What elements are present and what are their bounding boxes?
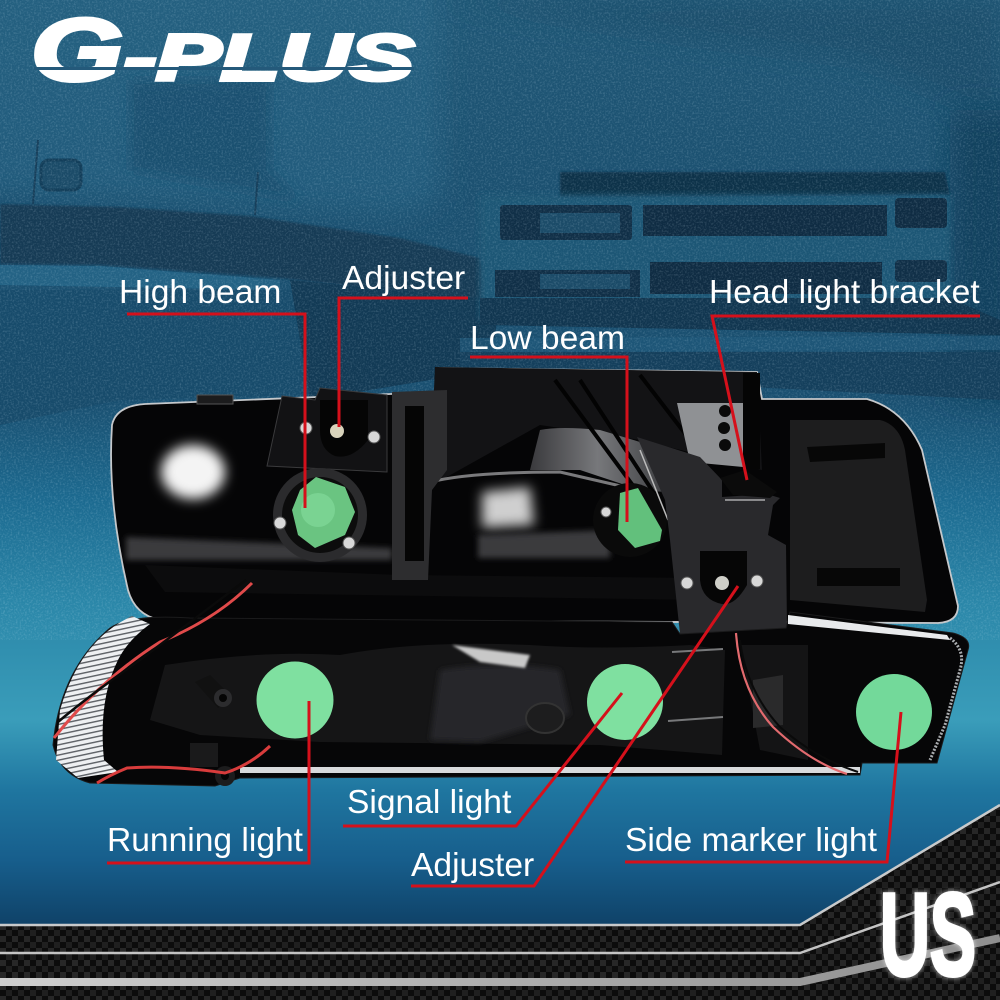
truck silhouette bbox=[0, 0, 1000, 425]
rods bbox=[668, 649, 723, 721]
side clip bbox=[753, 675, 783, 728]
label: Adjuster (top) bbox=[339, 260, 468, 427]
dark right module bbox=[740, 645, 808, 760]
glare right of centre bbox=[478, 530, 610, 558]
top bracket plate bbox=[430, 367, 762, 510]
lower signal housing bbox=[53, 612, 969, 786]
label: Signal light: Signal light bbox=[347, 784, 512, 821]
inner reflector bbox=[150, 644, 725, 755]
label: Low beam bbox=[470, 320, 627, 522]
vertical pillar bbox=[392, 390, 447, 580]
low beam socket bbox=[593, 450, 668, 557]
reflector lower slot bbox=[817, 568, 900, 586]
logo: G-PLUS: G bbox=[31, 0, 123, 99]
label: High beam bbox=[119, 274, 305, 508]
reflector highlight bbox=[430, 665, 570, 742]
mounting tab bbox=[197, 395, 233, 404]
bottom ledge of housing bbox=[145, 565, 700, 600]
lower grey band bbox=[126, 537, 392, 560]
label: Head light bracket: Head light bracket bbox=[709, 274, 980, 311]
ribbed right edge bbox=[930, 638, 962, 760]
label: Adjuster (bottom) bbox=[411, 586, 738, 886]
logo: G-PLUS: -PLUS bbox=[124, 21, 414, 94]
socket post lower bbox=[190, 743, 235, 786]
oval boss bbox=[526, 703, 564, 733]
silver plate with bolts bbox=[677, 403, 743, 467]
reflector slots bbox=[807, 443, 885, 462]
bottom carbon strip and corner bbox=[0, 805, 1000, 1000]
reflector glare centre bbox=[482, 487, 534, 528]
label: Running light: Running light bbox=[107, 822, 304, 859]
textured right reflector bbox=[790, 420, 927, 612]
high beam socket bbox=[273, 468, 367, 562]
logo: G-PLUS bbox=[31, 0, 414, 99]
socket post upper bbox=[195, 675, 232, 708]
bottom lens strip bbox=[240, 767, 860, 773]
side marker lens bbox=[856, 674, 932, 750]
background speckle bbox=[0, 0, 1000, 640]
grille and lamp openings bbox=[495, 198, 947, 297]
right adjuster bracket bbox=[637, 437, 787, 634]
label: Side marker light bbox=[625, 712, 901, 862]
headlight glare left bbox=[161, 445, 225, 499]
left adjuster bracket bbox=[267, 388, 387, 472]
running light lens bbox=[256, 662, 334, 738]
reflector glare bbox=[452, 645, 530, 668]
label: Low beam: Low beam bbox=[470, 320, 625, 357]
upper headlight housing bbox=[111, 367, 958, 634]
label: Adjuster (bottom): Adjuster bbox=[411, 847, 534, 884]
label: High beam: High beam bbox=[119, 274, 281, 311]
label: Signal light bbox=[343, 693, 622, 826]
wiring bbox=[54, 580, 858, 783]
label: Adjuster (top): Adjuster bbox=[342, 260, 465, 297]
signal light lens bbox=[587, 664, 663, 740]
label: Running light bbox=[107, 701, 309, 863]
label: Head light bracket bbox=[709, 274, 980, 480]
ribbed left lens bbox=[56, 616, 150, 778]
label: Side marker light: Side marker light bbox=[625, 822, 878, 859]
white top strip right bbox=[788, 615, 950, 640]
